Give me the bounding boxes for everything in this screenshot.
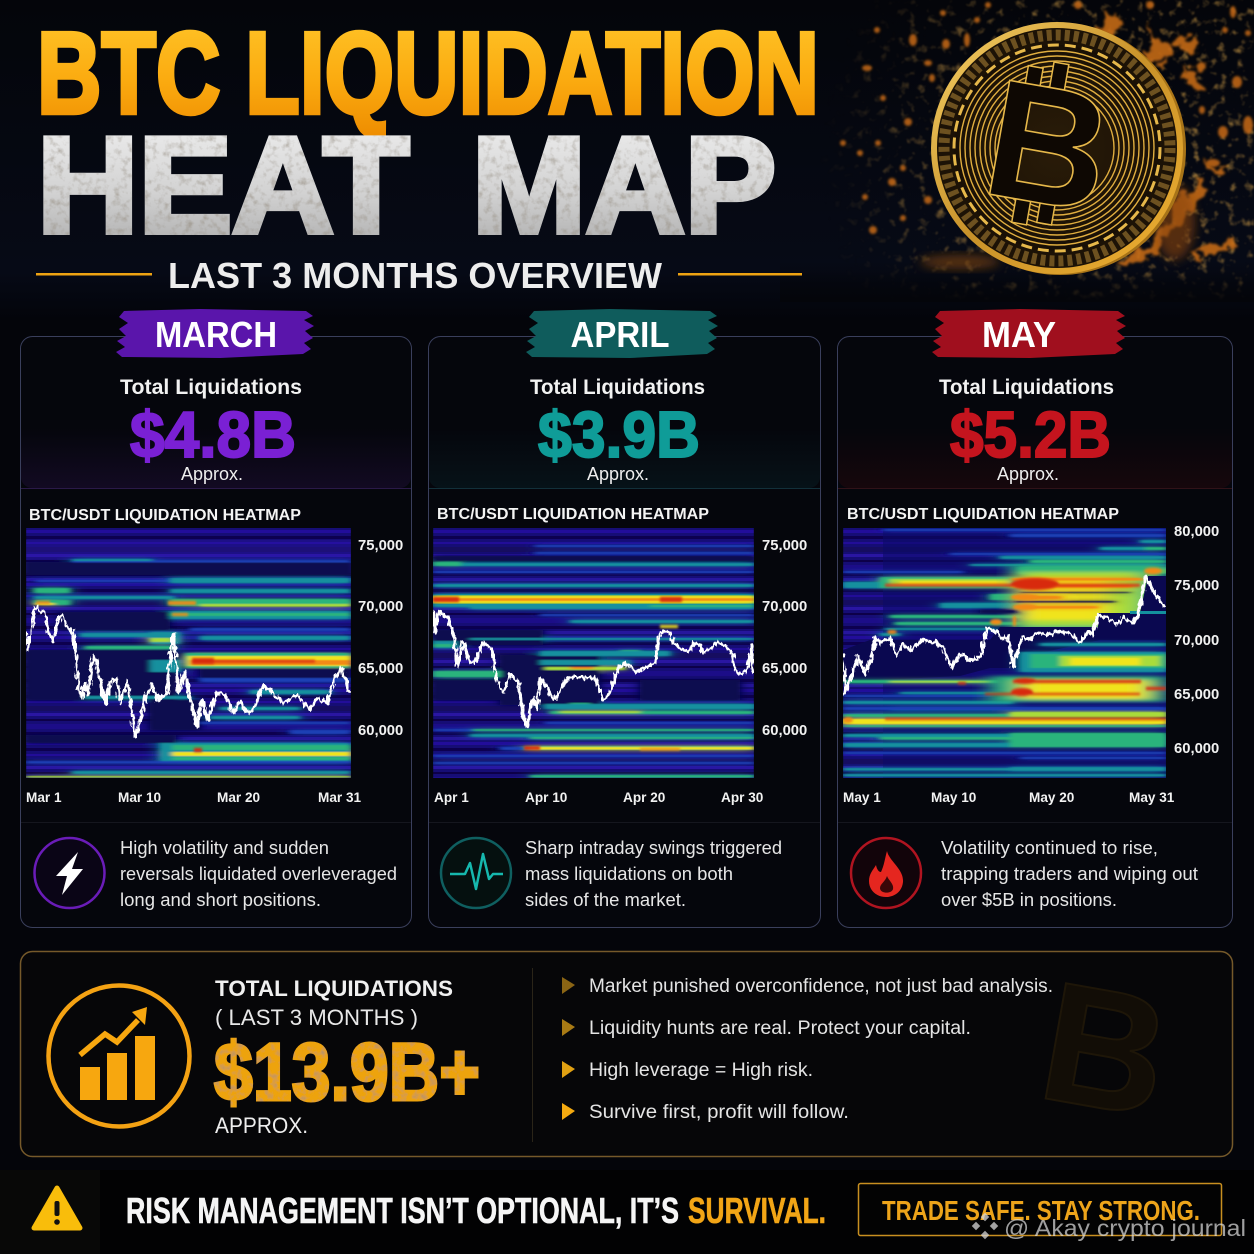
icon: faint bitcoin watermark: B <box>1028 946 1182 1154</box>
March date axis: Mar 10 <box>118 790 161 805</box>
icon: warning triangle <box>34 1188 80 1228</box>
panel: three-month summary <box>20 946 1232 1156</box>
May description: Volatility continued to rise, <box>941 838 1158 858</box>
March price axis <box>358 538 403 739</box>
May price axis: 65,000 <box>1174 687 1219 703</box>
April description: mass liquidations on both <box>525 864 733 884</box>
March date axis: Mar 1 <box>26 790 62 805</box>
chart: March heatmap <box>26 528 351 778</box>
May description <box>941 838 1198 910</box>
panel: April <box>428 309 820 928</box>
April price axis: 70,000 <box>762 599 807 615</box>
March total: Total Liquidations <box>120 375 302 399</box>
April total: Total Liquidations <box>530 375 705 399</box>
March price axis: 70,000 <box>358 599 403 615</box>
March total: Approx. <box>181 464 243 484</box>
March price axis: 60,000 <box>358 723 403 739</box>
April price axis: 75,000 <box>762 538 807 554</box>
title line one: BTC LIQUIDATION <box>37 8 819 138</box>
May banner: MAY <box>982 314 1056 355</box>
March date axis: Mar 31 <box>318 790 362 805</box>
risk message: RISK MANAGEMENT ISN’T OPTIONAL, IT’S <box>126 1190 679 1231</box>
March description: reversals liquidated overleveraged <box>120 864 397 884</box>
April price axis <box>762 538 807 739</box>
fire and sparks backdrop <box>838 0 1254 298</box>
May total: Approx. <box>997 464 1059 484</box>
May total: $5.2B <box>950 398 1111 471</box>
icon: bitcoin coin <box>931 22 1186 275</box>
April description <box>525 838 782 910</box>
panel: March <box>20 309 412 928</box>
key takeaways: High leverage = High risk. <box>589 1060 813 1081</box>
chart: May heatmap <box>843 528 1166 778</box>
April date axis: Apr 20 <box>623 790 665 805</box>
key takeaways: Liquidity hunts are real. Protect your capital. <box>589 1018 971 1039</box>
May total <box>939 375 1114 484</box>
May date axis: May 20 <box>1029 790 1074 805</box>
March price line <box>26 607 350 737</box>
key takeaways <box>562 976 1053 1123</box>
April total: Approx. <box>587 464 649 484</box>
May total: Total Liquidations <box>939 375 1114 399</box>
summary figures: APPROX. <box>215 1113 308 1138</box>
April price line <box>433 610 753 727</box>
April date axis: Apr 10 <box>525 790 567 805</box>
April total: $3.9B <box>538 398 700 471</box>
April banner: APRIL <box>570 314 670 355</box>
April date axis: Apr 30 <box>721 790 763 805</box>
May date axis: May 10 <box>931 790 976 805</box>
March date axis <box>26 790 362 805</box>
March total <box>120 375 302 484</box>
May date axis <box>843 790 1175 805</box>
chart: April heatmap <box>433 528 755 778</box>
March banner: MARCH <box>155 314 277 355</box>
May date axis: May 1 <box>843 790 881 805</box>
March heatmap title: BTC/USDT LIQUIDATION HEATMAP <box>29 507 301 524</box>
summary figures <box>214 976 480 1138</box>
April date axis <box>434 790 763 805</box>
footer banner <box>0 1170 1254 1254</box>
summary figures: TOTAL LIQUIDATIONS <box>215 976 453 1001</box>
April description: sides of the market. <box>525 890 686 910</box>
May price line <box>843 577 1165 693</box>
May banner <box>932 309 1126 358</box>
key takeaways: Survive first, profit will follow. <box>589 1102 849 1123</box>
title line two: HEAT <box>37 109 409 261</box>
summary figures: ( LAST 3 MONTHS ) <box>215 1005 418 1030</box>
May price axis: 60,000 <box>1174 741 1219 757</box>
subtitle with rules: LAST 3 MONTHS OVERVIEW <box>168 255 662 296</box>
May heatmap title: BTC/USDT LIQUIDATION HEATMAP <box>847 506 1119 523</box>
panel: May <box>838 309 1232 928</box>
March date axis: Mar 20 <box>217 790 260 805</box>
summary figures: $13.9B+ <box>214 1027 480 1118</box>
March description: long and short positions. <box>120 890 321 910</box>
May price axis: 75,000 <box>1174 578 1219 594</box>
April heatmap title: BTC/USDT LIQUIDATION HEATMAP <box>437 506 709 523</box>
March banner <box>116 309 314 358</box>
March description: High volatility and sudden <box>120 838 329 858</box>
icon: lightning bolt <box>34 838 104 908</box>
April description: Sharp intraday swings triggered <box>525 838 782 858</box>
March total: $4.8B <box>130 398 296 471</box>
May date axis: May 31 <box>1129 790 1175 805</box>
title line two <box>37 109 776 261</box>
title line two: MAP <box>472 109 776 261</box>
May price axis: 80,000 <box>1174 524 1219 540</box>
call to action button <box>858 1184 1222 1236</box>
March price axis: 75,000 <box>358 538 403 554</box>
May price axis: 70,000 <box>1174 633 1219 649</box>
icon: rising chart <box>48 986 190 1126</box>
icon: pulse line <box>441 838 511 908</box>
April total <box>530 375 705 484</box>
risk message: SURVIVAL. <box>688 1190 826 1231</box>
May description: trapping traders and wiping out <box>941 864 1198 884</box>
March price axis: 65,000 <box>358 661 403 677</box>
April date axis: Apr 1 <box>434 790 469 805</box>
April price axis: 65,000 <box>762 661 807 677</box>
May price axis <box>1174 524 1219 757</box>
key takeaways: Market punished overconfidence, not just bad analysis. <box>589 976 1053 997</box>
May description: over $5B in positions. <box>941 890 1117 910</box>
icon: bitcoin coin: B <box>972 43 1124 249</box>
icon: flame <box>851 838 921 908</box>
April banner <box>526 309 718 358</box>
March description <box>120 838 397 910</box>
source watermark: @ Akay crypto journal <box>1004 1215 1246 1241</box>
April price axis: 60,000 <box>762 723 807 739</box>
